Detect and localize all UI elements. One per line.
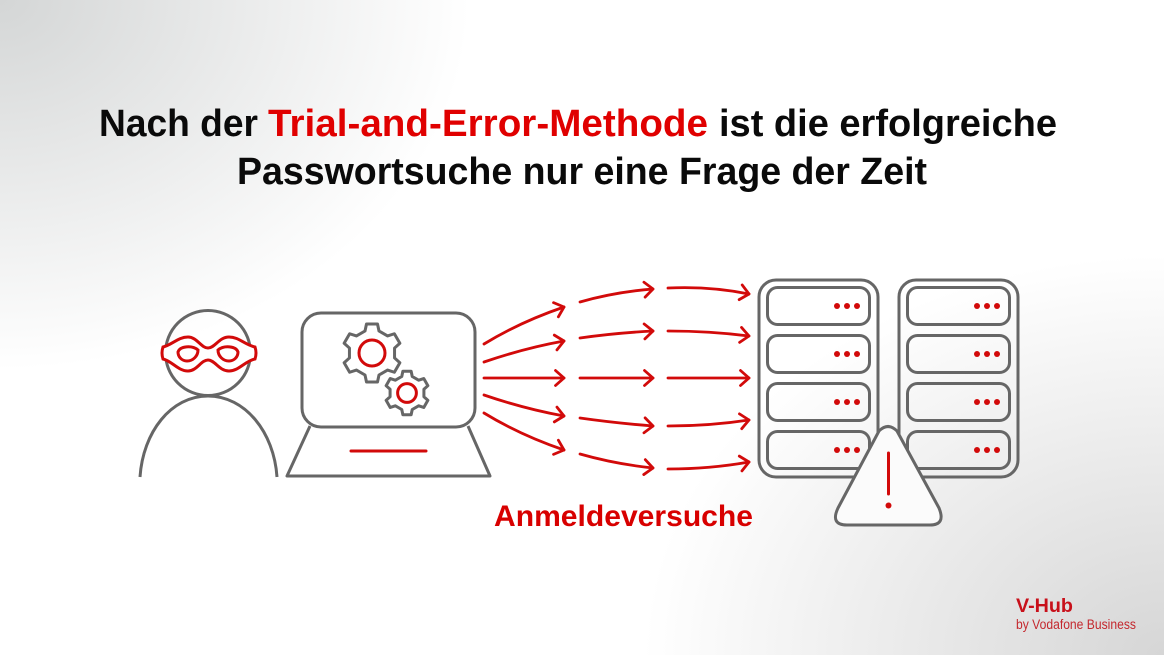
title: Nach der <box>99 103 258 145</box>
title: Trial-and-Error-Methode <box>268 103 708 145</box>
hacker body <box>140 396 277 477</box>
small gear <box>386 371 428 415</box>
logo: V-Hub by Vodafone Business: V-Hub <box>1016 595 1073 617</box>
logo: V-Hub by Vodafone Business: by Vodafone Business <box>1016 617 1136 632</box>
icon: right server rack <box>899 280 1018 477</box>
icon: laptop with gears <box>287 313 490 476</box>
icon: masked hacker <box>140 310 277 477</box>
hacker head <box>166 310 250 396</box>
icon: warning triangle <box>835 426 941 525</box>
title <box>99 103 1057 193</box>
large gear <box>344 324 400 382</box>
arrows: login attempts <box>484 288 749 469</box>
logo: V-Hub by Vodafone Business <box>1016 595 1136 632</box>
title: ist die erfolgreiche <box>719 103 1057 145</box>
laptop red line <box>351 450 426 452</box>
icon: left server rack <box>759 280 878 477</box>
label: login attempts: Anmeldeversuche <box>494 500 753 533</box>
title: Passwortsuche nur eine Frage der Zeit <box>237 151 927 193</box>
red mask <box>162 337 256 371</box>
laptop screen <box>302 313 475 427</box>
laptop base <box>287 426 490 476</box>
